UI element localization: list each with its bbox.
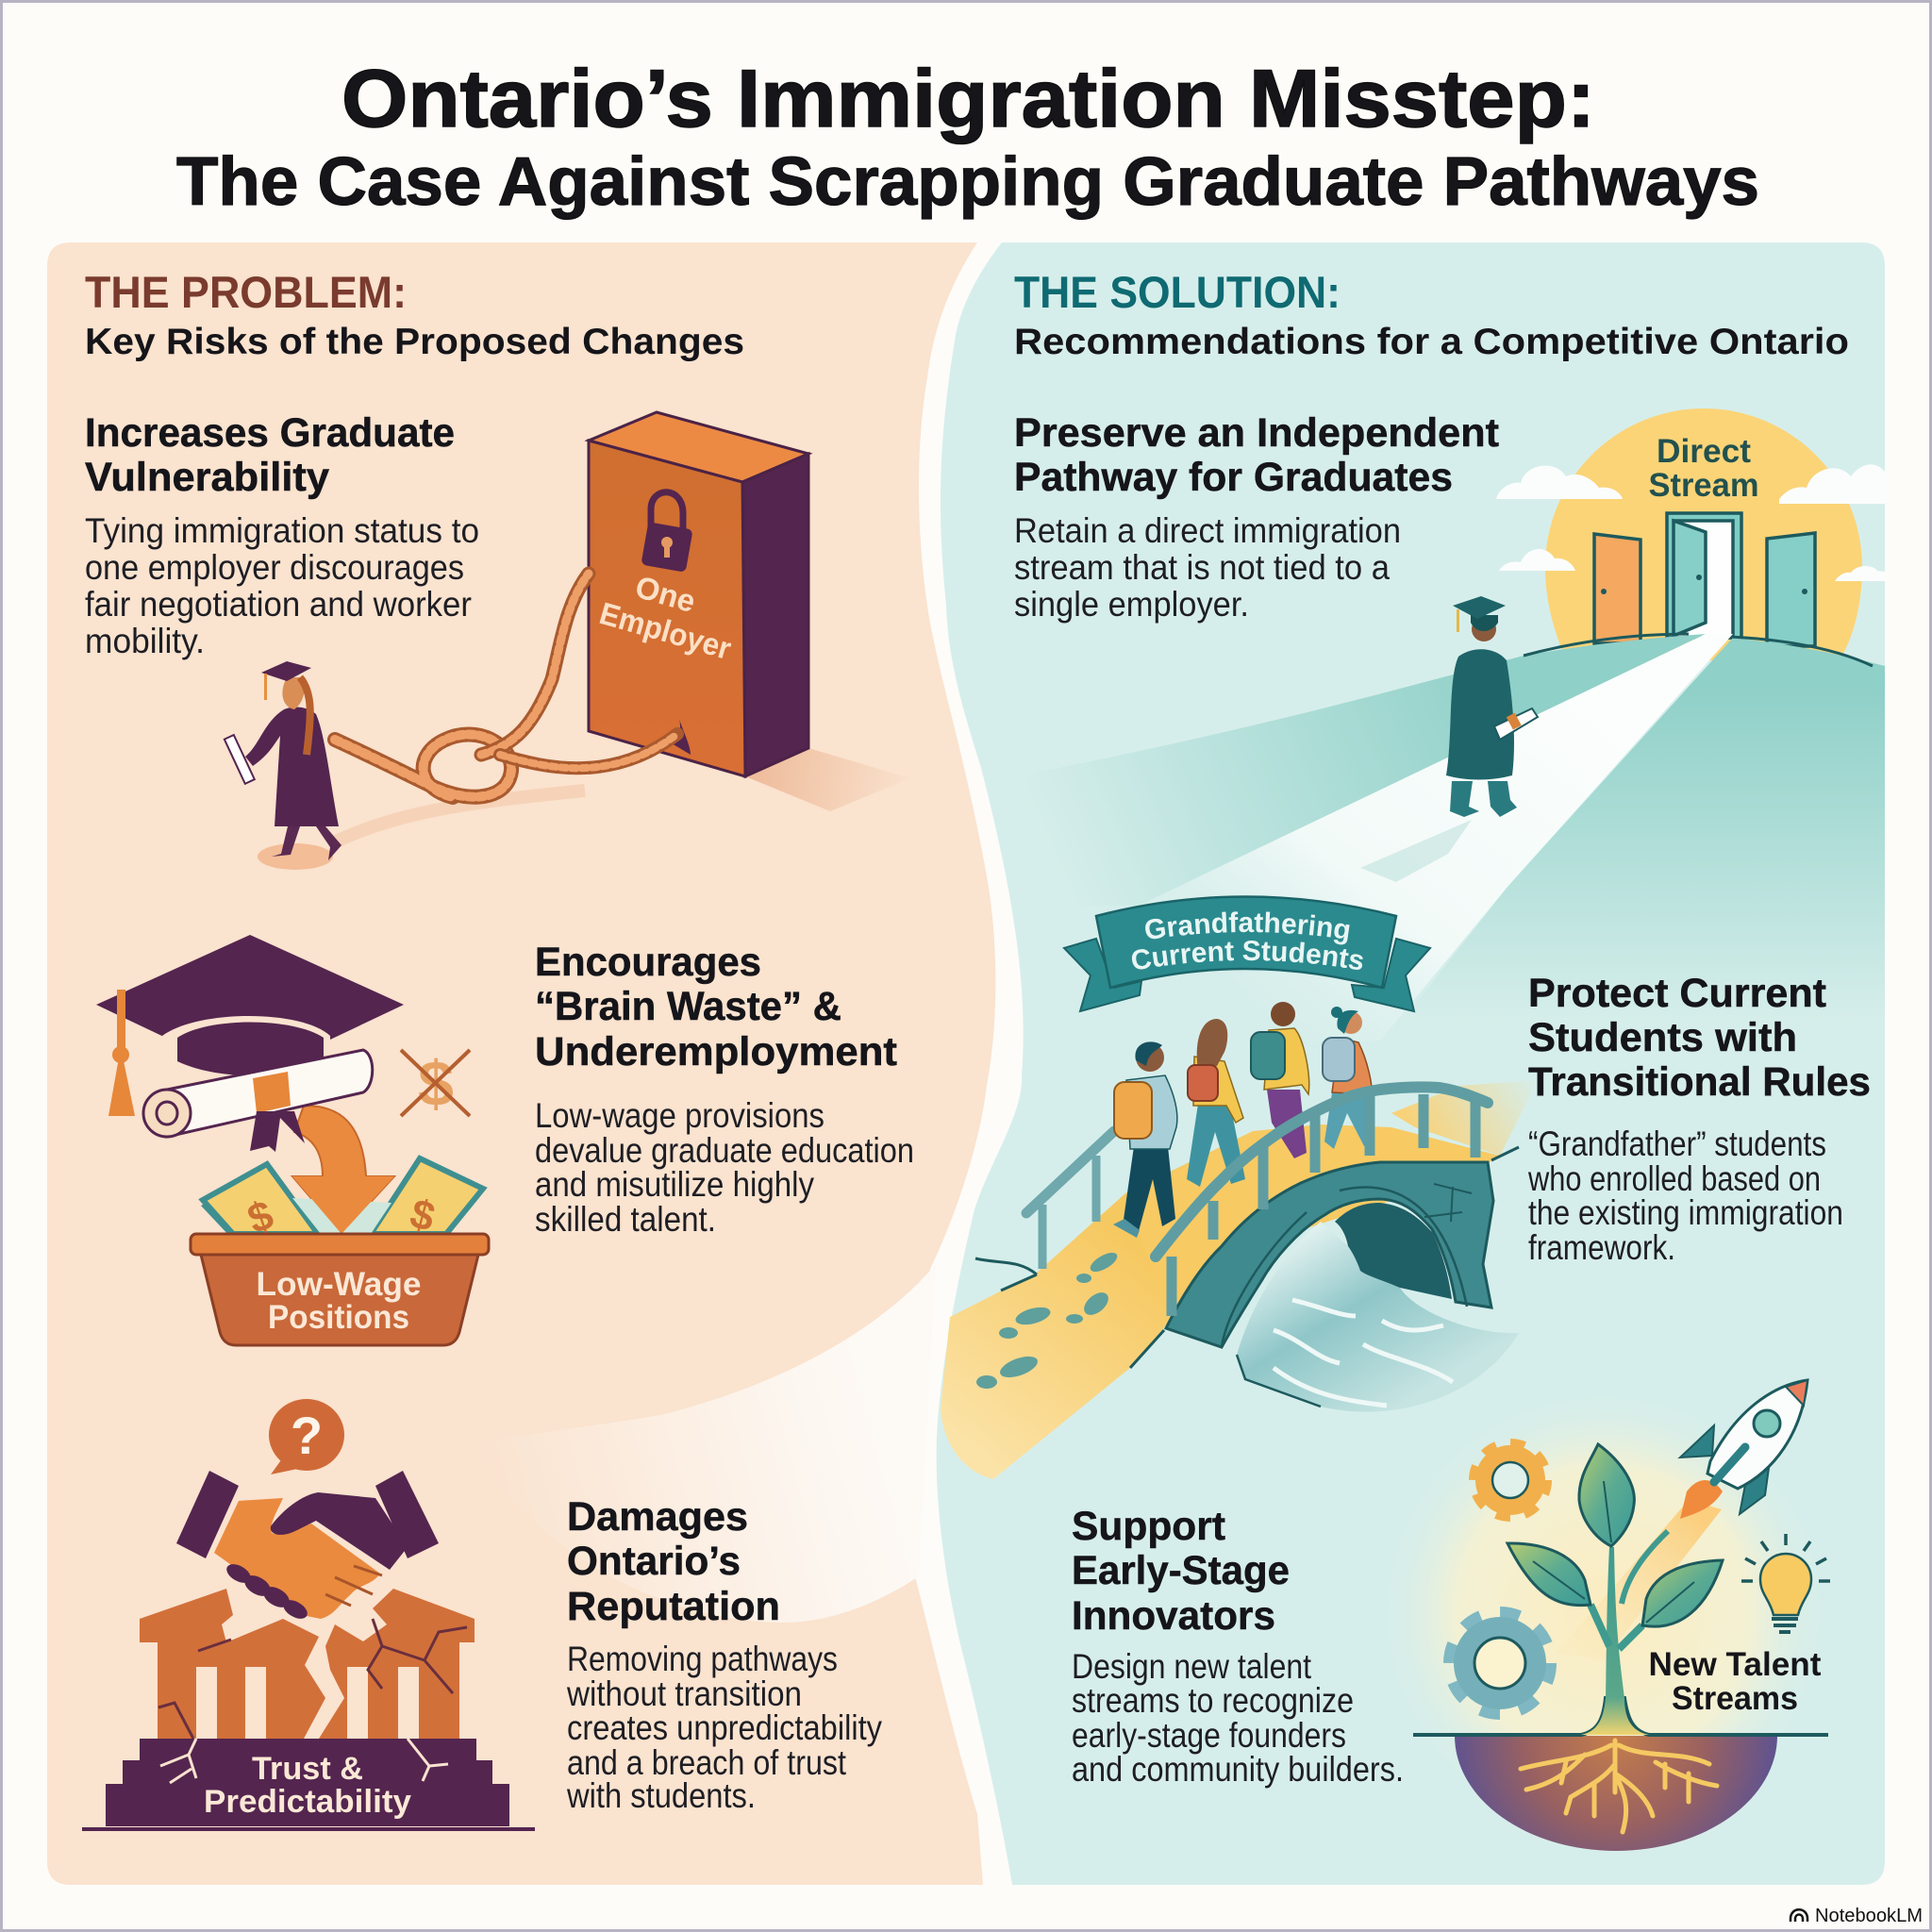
icon: stone steps with label (82, 1739, 535, 1829)
text block: brain waste: Encourages (535, 940, 761, 985)
text block: preserve independent pathway: stream that is not tied to a (1014, 548, 1390, 587)
panel: the solution (936, 242, 1885, 1885)
text block: damages reputation: with students. (566, 1776, 756, 1815)
text block: brain waste: skilled talent. (535, 1200, 716, 1239)
text block: support early-stage innovators: Early-Stage (1072, 1548, 1290, 1593)
icon: banknotes: $ (406, 1191, 440, 1241)
title: Ontario’s Immigration Misstep: (341, 54, 1595, 144)
arrow: down into low wages (292, 1106, 394, 1234)
text block: support early-stage innovators: early-stage founders (1072, 1716, 1346, 1755)
text block: brain waste: “Brain Waste” & (535, 984, 841, 1029)
text block: damages reputation: Damages (567, 1494, 748, 1540)
box: one employer (589, 412, 808, 776)
water under bridge (1237, 1222, 1519, 1412)
icon: rocket (1680, 1380, 1807, 1519)
text block: support early-stage innovators: streams to recognize (1072, 1681, 1354, 1720)
illustration: direct stream doors and path (1015, 408, 1885, 1041)
text block: preserve independent pathway: Pathway for Graduates (1014, 455, 1453, 500)
text block: protect current students: framework. (1528, 1228, 1675, 1267)
road (1066, 634, 1733, 1041)
banner: grandfathering current students: Current Students (1132, 941, 1363, 970)
label: new talent streams (1649, 1646, 1822, 1717)
text block: damages reputation: Ontario’s (567, 1539, 741, 1584)
text block: protect current students (1527, 971, 1871, 1267)
icon: crossed-out dollar: $ (418, 1048, 454, 1120)
yellow path (941, 1080, 1538, 1479)
heading: the solution (1014, 267, 1849, 362)
title (176, 54, 1759, 220)
illustration: graduate tied to one-employer box (225, 412, 910, 870)
icon: orange gear (1474, 1443, 1547, 1517)
text block: increases graduate vulnerability: fair negotiation and worker (85, 585, 472, 624)
heading: the problem (85, 267, 744, 362)
text block: preserve independent pathway: single employer. (1014, 585, 1249, 624)
figure: student 1 (1113, 1041, 1177, 1238)
rope with knot (335, 574, 677, 797)
heading: the problem: Key Risks of the Proposed Changes (85, 322, 744, 362)
text block: damages reputation (566, 1494, 882, 1815)
box: one employer: Employer (596, 595, 735, 666)
figure: student 2 (1187, 1019, 1245, 1187)
icon: blue gear (1450, 1613, 1550, 1713)
label: new talent streams: Streams (1672, 1680, 1798, 1717)
text block: damages reputation: without transition (566, 1674, 802, 1713)
hills (1015, 634, 1706, 906)
banner: grandfathering current students (1062, 895, 1432, 1013)
icon: sprout (1507, 1444, 1723, 1735)
label: new talent streams: New Talent (1649, 1646, 1822, 1683)
figure: female graduate (225, 661, 341, 860)
text block: protect current students: Protect Current (1528, 971, 1826, 1016)
text block: preserve independent pathway (1014, 410, 1499, 624)
text block: increases graduate vulnerability: mobility. (85, 622, 205, 660)
text block: brain waste (535, 940, 914, 1239)
text block: protect current students: Students with (1528, 1015, 1797, 1060)
icon: question bubble: ? (291, 1406, 323, 1465)
front railing (1156, 1087, 1488, 1316)
text block: support early-stage innovators: Innovators (1072, 1593, 1275, 1639)
label: direct stream: Direct (1657, 433, 1751, 470)
text block: increases graduate vulnerability: Tying immigration status to (85, 511, 479, 550)
figure: graduate walking (1446, 596, 1538, 817)
text block: damages reputation: Removing pathways (567, 1640, 838, 1678)
text block: protect current students: Transitional Rules (1528, 1059, 1871, 1105)
back railing (1026, 1131, 1114, 1269)
text block: brain waste: Low-wage provisions (535, 1096, 824, 1135)
figure: student 3 (1251, 1002, 1309, 1158)
text block: support early-stage innovators: and community builders. (1072, 1750, 1404, 1789)
icon: low-wage basket: Positions (268, 1299, 409, 1336)
panel: the problem (47, 242, 995, 1885)
text block: protect current students: who enrolled based on (1527, 1159, 1821, 1198)
text block: brain waste: Underemployment (535, 1029, 897, 1074)
text block: increases graduate vulnerability (85, 410, 479, 660)
text block: support early-stage innovators: Support (1072, 1504, 1225, 1549)
text block: preserve independent pathway: Retain a direct immigration (1014, 511, 1401, 550)
illustration: students crossing bridge (941, 895, 1532, 1479)
banner: grandfathering current students: Grandfathering (1145, 911, 1350, 945)
text block: damages reputation: Reputation (567, 1584, 780, 1629)
icon: light bulb (1741, 1534, 1830, 1632)
box: one employer: One (631, 569, 699, 619)
heading: the solution: Recommendations for a Competitive Ontario (1014, 322, 1849, 362)
icon: crossed-out dollar (401, 1048, 470, 1120)
icon: low-wage basket (191, 1234, 489, 1345)
heading: the problem: THE PROBLEM: (85, 267, 407, 317)
label: direct stream (1649, 433, 1758, 504)
icon: diploma (143, 1050, 373, 1152)
text block: preserve independent pathway: Preserve an Independent (1014, 410, 1499, 456)
icon: graduation cap (96, 935, 404, 1116)
icon: handshake (176, 1471, 439, 1623)
icon: banknotes: $ (242, 1191, 279, 1243)
heading: the solution: THE SOLUTION: (1014, 267, 1341, 317)
icon: soil and roots (1413, 1698, 1828, 1851)
clouds (1496, 464, 1885, 581)
text block: protect current students: the existing immigration (1528, 1193, 1843, 1232)
icon: stone steps with label: Predictability (204, 1784, 411, 1820)
title: The Case Against Scrapping Graduate Pathways (176, 144, 1759, 220)
text block: brain waste: and misutilize highly (535, 1165, 814, 1204)
icon: question bubble (269, 1399, 344, 1474)
text block: brain waste: devalue graduate education (535, 1131, 914, 1170)
text block: support early-stage innovators: Design new talent (1072, 1647, 1312, 1686)
figure: student 4 (1323, 1007, 1373, 1149)
icon: stone bridge (1166, 1162, 1493, 1347)
text block: increases graduate vulnerability: one employer discourages (85, 548, 464, 587)
text block: support early-stage innovators (1072, 1504, 1404, 1789)
text block: protect current students: “Grandfather” students (1528, 1124, 1826, 1163)
text block: damages reputation: and a breach of trust (567, 1743, 847, 1782)
icon: stone steps with label: Trust & (252, 1751, 363, 1787)
illustration: new talent streams plant (1377, 1380, 1830, 1851)
watermark: NotebookLM: NotebookLM (1815, 1906, 1923, 1926)
illustration: cap, diploma and low-wage basket (96, 935, 489, 1345)
icon: sun (1545, 408, 1862, 660)
icon: banknotes (201, 1158, 483, 1243)
text block: increases graduate vulnerability: Vulnerability (85, 455, 329, 500)
icon: cracked building (140, 1589, 475, 1739)
label: direct stream: Stream (1649, 467, 1758, 504)
icon: three doors (1594, 513, 1815, 646)
illustration: handshake over cracked institution (82, 1399, 535, 1829)
text block: increases graduate vulnerability: Increases Graduate (85, 410, 455, 456)
text block: damages reputation: creates unpredictability (567, 1708, 882, 1747)
icon: low-wage basket: Low-Wage (257, 1266, 421, 1303)
